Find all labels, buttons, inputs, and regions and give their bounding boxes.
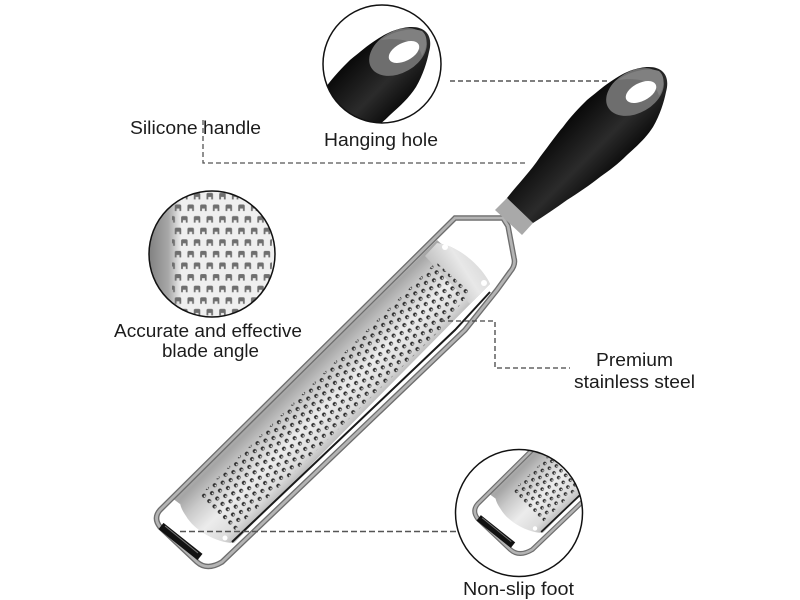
inset ring — [323, 5, 441, 123]
leader line: hanging hole — [450, 80, 610, 82]
leader line: premium stainless steel — [440, 321, 570, 368]
label: hanging hole: Hanging hole — [324, 130, 438, 150]
label: silicone handle: Silicone handle — [130, 118, 261, 138]
leader line: non-slip foot — [180, 530, 457, 532]
handle — [495, 58, 672, 235]
label: premium stainless steel — [574, 350, 695, 392]
inset ring — [149, 191, 275, 317]
inset circle: non-slip foot — [454, 448, 584, 578]
label: accurate and effective blade angle: Accurate and effective — [114, 321, 302, 341]
inset ring — [456, 450, 582, 576]
leader line: silicone handle — [203, 120, 526, 163]
inset handle detail — [328, 27, 430, 122]
label: premium stainless steel: Premium — [596, 350, 673, 370]
label: accurate and effective blade angle: blade angle — [162, 341, 259, 361]
label: non-slip foot: Non-slip foot — [463, 579, 574, 599]
label: accurate and effective blade angle — [114, 321, 302, 361]
inset circle: hanging hole — [322, 4, 442, 124]
handle grip — [507, 58, 672, 223]
inset circle: blade angle — [148, 190, 278, 320]
inset foot detail — [472, 451, 582, 556]
label: premium stainless steel: stainless steel — [574, 372, 695, 392]
grater frame and blade — [156, 218, 514, 566]
inset blade detail — [148, 190, 278, 320]
handle collar — [495, 198, 533, 235]
